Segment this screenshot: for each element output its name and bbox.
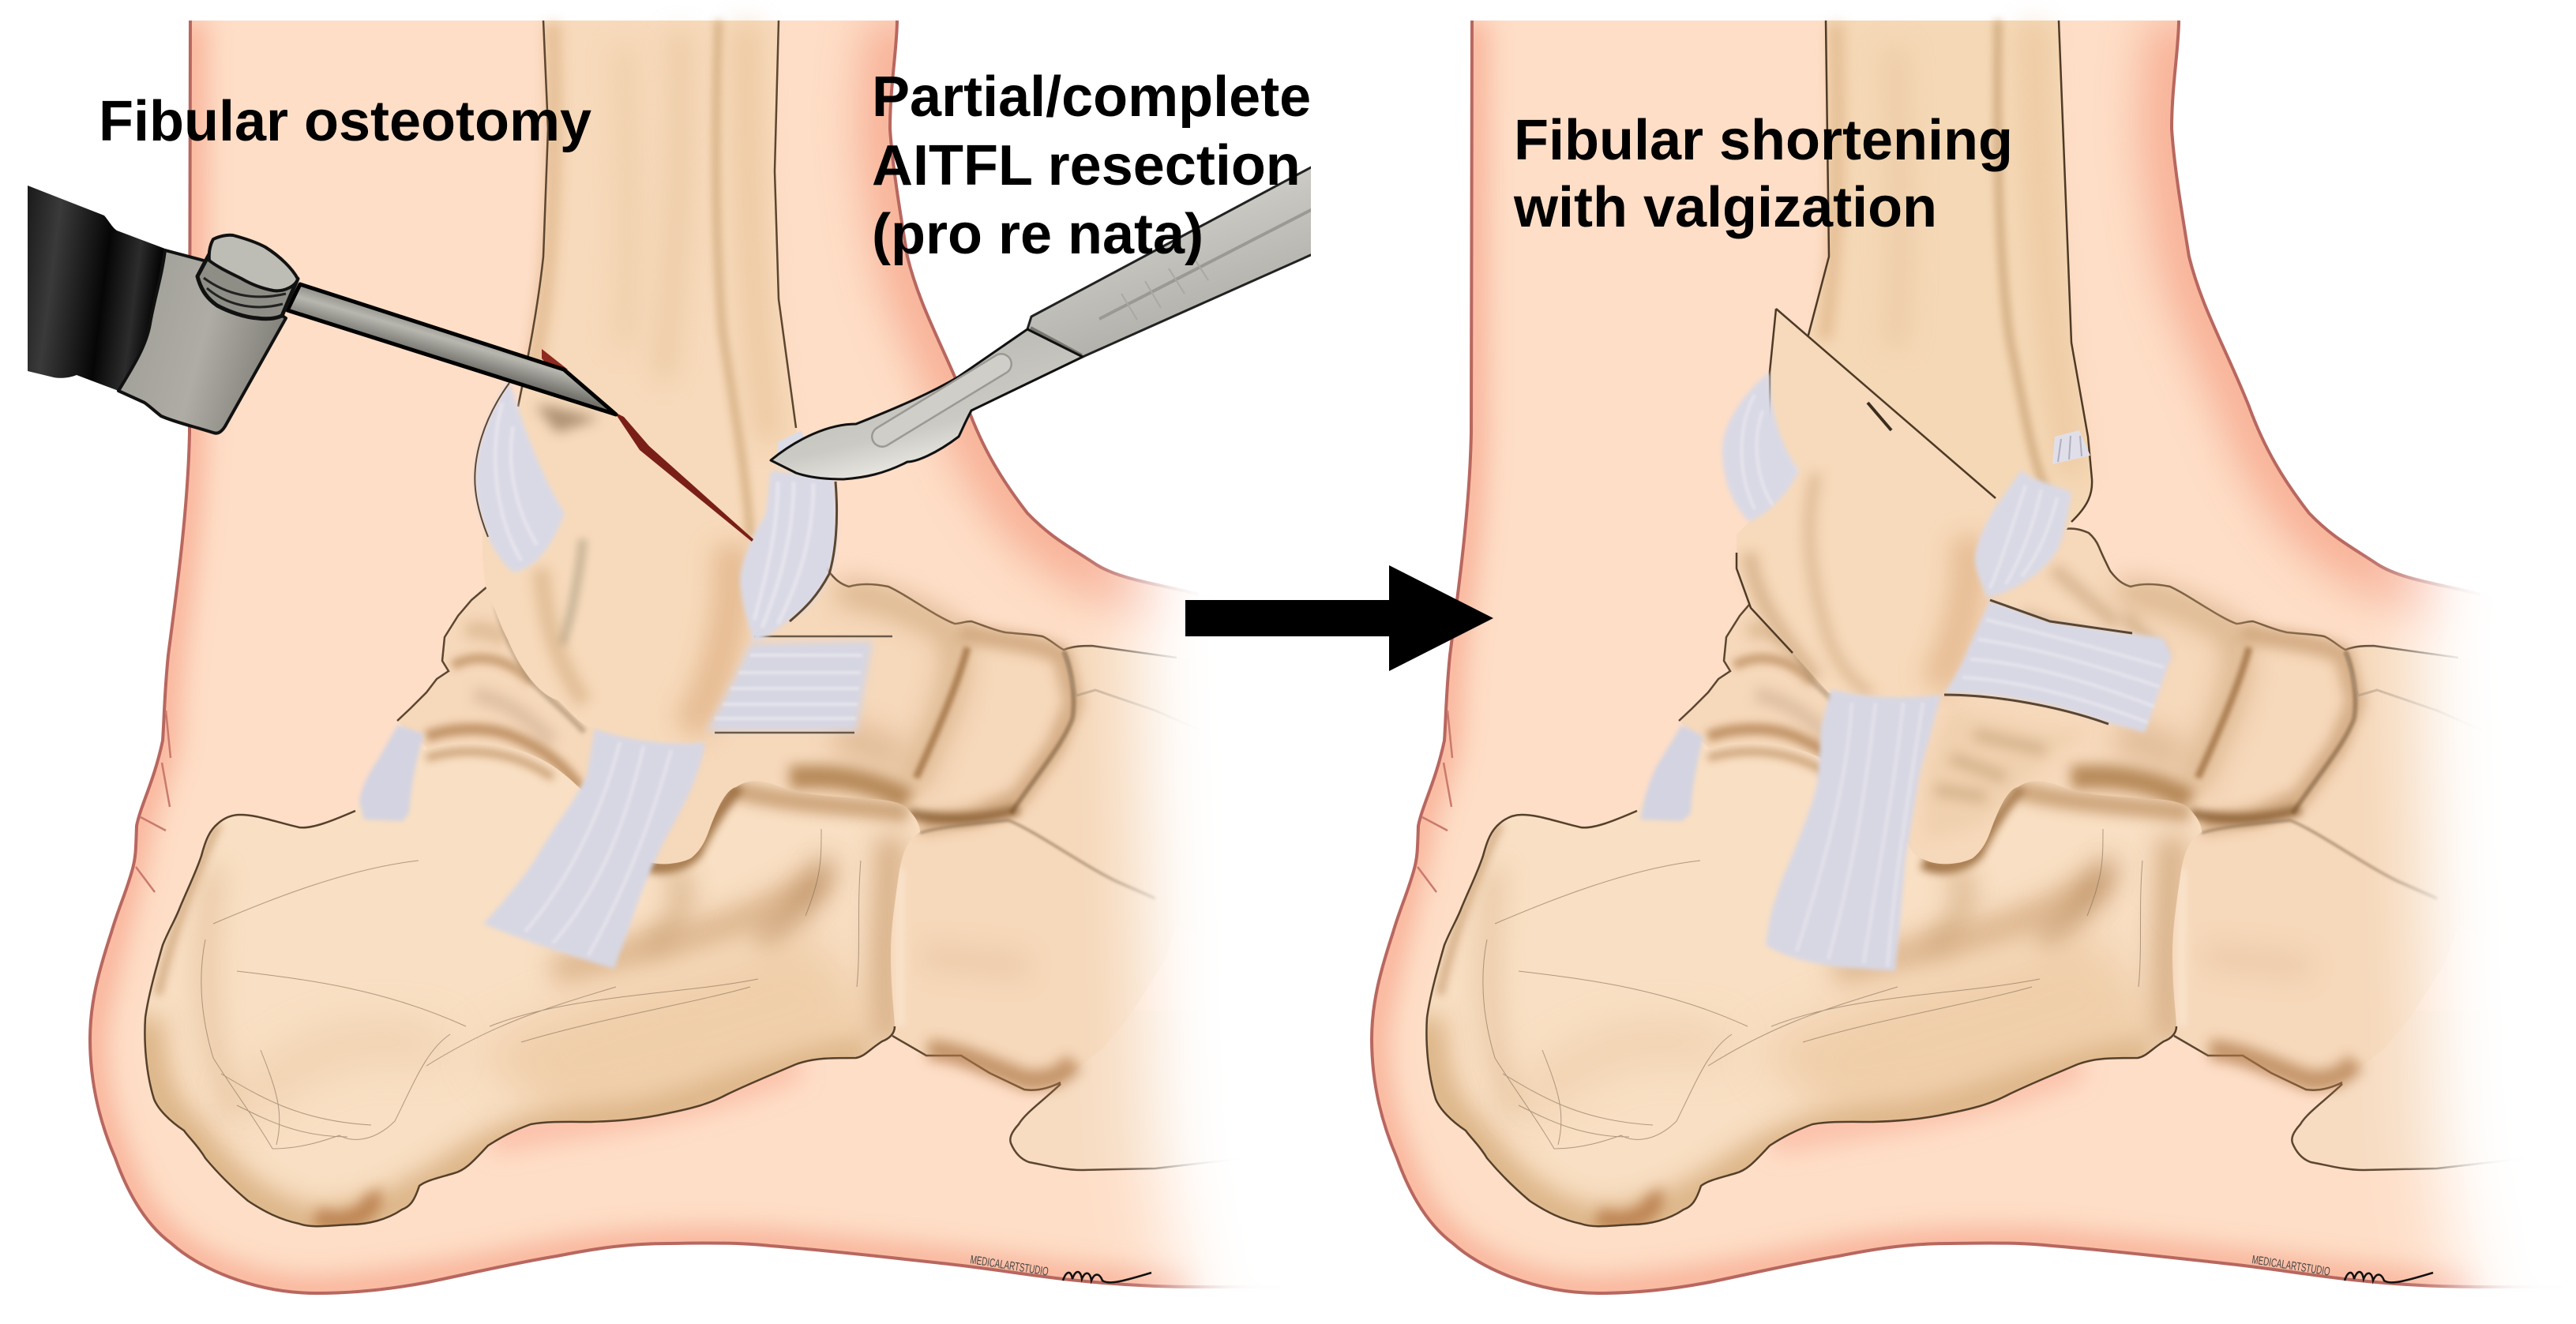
text block: AITFL resection: AITFL resection bbox=[872, 134, 1301, 197]
skin and foot bones, right bbox=[1372, 21, 2561, 1293]
saw shaft bbox=[287, 284, 616, 414]
arrow bbox=[1185, 565, 1493, 671]
ligament: anterior talofibular, right bbox=[1944, 600, 2172, 733]
ligament: posterior tendon, left bbox=[359, 725, 424, 821]
heading: fibular osteotomy: Fibular osteotomy bbox=[99, 90, 591, 153]
ligament: posterior tibiofibular bbox=[475, 381, 565, 572]
ligament: anterior talofibular, left bbox=[707, 636, 892, 733]
panel: fibular osteotomy (left ankle illustration) bbox=[90, 21, 1421, 1324]
tibia, right bbox=[1808, 21, 2092, 584]
panel: fibular shortening with valgization (right ankle illustration) bbox=[1372, 21, 2576, 1324]
fade to white bbox=[2419, 395, 2576, 1324]
tibia and fibula, left bbox=[483, 21, 809, 745]
fade to white bbox=[1137, 395, 1421, 1324]
ligament: anterior tibiofibular stump on fibula, right bbox=[1975, 471, 2071, 598]
ligament: calcaneofibular, left bbox=[483, 729, 705, 969]
shifted distal fibula, right bbox=[1737, 309, 1996, 701]
ligament: anterior tibiofibular, left bbox=[740, 430, 837, 642]
signature, left bbox=[969, 1253, 1151, 1282]
talar lateral process detail, right bbox=[1924, 568, 2164, 837]
text block: fibular shortening: with valgization bbox=[1513, 176, 1937, 239]
signature, right bbox=[2251, 1253, 2433, 1282]
saw black body bbox=[28, 186, 201, 391]
icon: scalpel bbox=[771, 167, 1312, 479]
scalpel handle bbox=[1027, 167, 1312, 357]
skin and foot bones, left bbox=[90, 21, 1279, 1293]
signature, right: MEDICALARTSTUDIO bbox=[2251, 1253, 2331, 1279]
osteotomy cut line bbox=[535, 349, 753, 542]
ligament: posterior tibiofibular, right bbox=[1722, 372, 1799, 522]
ligament: tibial stump, right bbox=[2052, 430, 2090, 464]
ligament: posterior tendon, right bbox=[1640, 725, 1703, 821]
icon: surgical saw bbox=[28, 186, 616, 433]
signature, left: MEDICALARTSTUDIO bbox=[969, 1253, 1050, 1279]
saw silver head bbox=[118, 250, 286, 433]
text block: AITFL resection: Partial/complete bbox=[872, 66, 1311, 129]
scalpel blade bbox=[771, 329, 1083, 479]
text block: AITFL resection: (pro re nata) bbox=[872, 203, 1204, 266]
saw cap bbox=[197, 235, 298, 319]
ligament: calcaneofibular, right bbox=[1766, 689, 1941, 971]
text block: fibular shortening: Fibular shortening bbox=[1514, 109, 2013, 172]
